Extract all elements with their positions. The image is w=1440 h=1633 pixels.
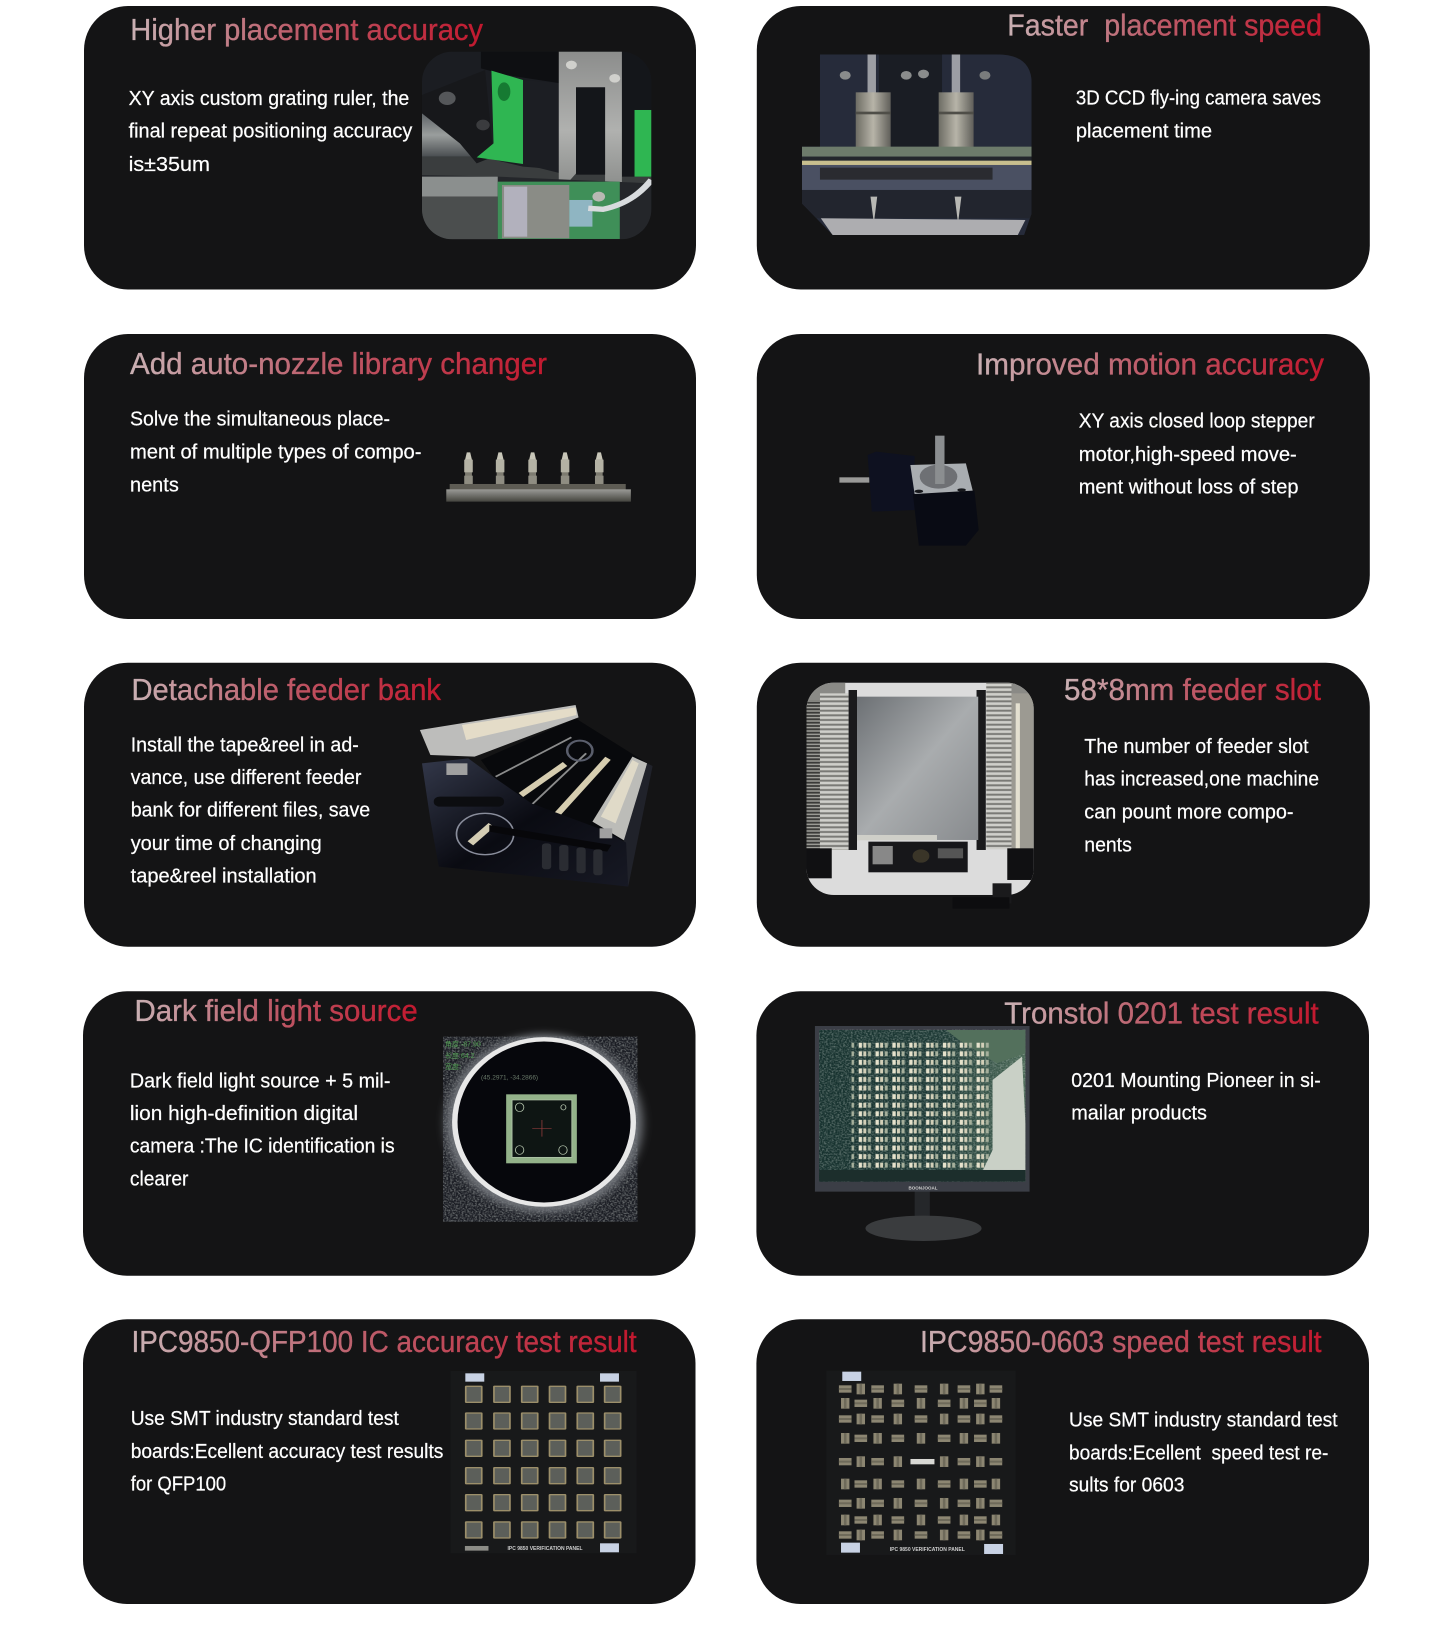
heading: IPC9850-QFP100 IC accuracy test result: IPC9850-QFP100 IC accuracy test result — [132, 1324, 637, 1359]
description: fly-ing camera — [1076, 88, 1321, 142]
image: IC under dark field light: 长度:64.2 — [445, 1051, 475, 1060]
image: placement heads — [802, 54, 1032, 235]
description: dark field camera: clearer — [130, 1169, 189, 1191]
heading: dark field light source: Dark field light source — [134, 993, 418, 1028]
description: fly-ing camera: 3D CCD fly-ing camera saves — [1076, 88, 1321, 110]
description: 0603 test boards — [1069, 1410, 1338, 1497]
panel: QFP100 accuracy test — [83, 1319, 696, 1604]
image: IC under dark field light: (45.2971, -34.2866) — [481, 1074, 538, 1082]
description: feeder bank — [131, 735, 370, 888]
description: stepper motor: motor,high-speed move- — [1079, 444, 1297, 466]
description: stepper motor — [1079, 411, 1315, 499]
panel: detachable feeder bank — [84, 663, 696, 947]
heading: add auto-nozzle library changer: Add auto-nozzle library changer — [130, 346, 547, 381]
heading: 58*8mm feeder slot: 58*8mm feeder slot — [1064, 672, 1321, 707]
panel: faster placement speed — [757, 6, 1370, 290]
description: feeder bank: Install the tape&reel in ad- — [131, 735, 359, 757]
panel: dark field light source — [83, 991, 696, 1276]
description: feeder slot count: nents — [1084, 834, 1132, 856]
image: 0603 verification board: IPC 9850 VERIFICATION PANEL — [890, 1547, 965, 1553]
description: feeder slot count: The number of feeder slot — [1084, 736, 1309, 758]
description: feeder bank: tape&reel installation — [131, 866, 317, 888]
image: monitor showing 0201 placement — [815, 1026, 1030, 1241]
description: dark field camera — [130, 1071, 395, 1191]
description: grating ruler: XY axis custom grating ruler, the — [129, 88, 409, 110]
image: machine top view — [807, 683, 1034, 909]
image: feeder bank frame — [420, 705, 653, 887]
heading: improved motion accuracy: Improved motion accuracy — [976, 346, 1324, 381]
description: 0201 mounting — [1071, 1070, 1321, 1125]
description: dark field camera: lion high-definition digital — [130, 1103, 358, 1125]
panel: 0201 test result — [756, 991, 1369, 1276]
panel: improved motion accuracy — [757, 334, 1370, 619]
image: IC under dark field light: 宽度: — [445, 1062, 461, 1071]
description: stepper motor: XY axis closed loop stepper — [1079, 411, 1315, 433]
description: stepper motor: ment without loss of step — [1079, 477, 1298, 499]
description: nozzle library: Solve the simultaneous place- — [130, 409, 390, 431]
description: dark field camera: camera :The IC identification is — [130, 1136, 395, 1158]
image: monitor showing 0201 placement: BOONJOOAL — [908, 1186, 938, 1190]
heading: faster placement speed: Faster placement speed — [1007, 8, 1322, 43]
description: QFP100 test boards: for QFP100 — [131, 1473, 226, 1495]
description: 0603 test boards: boards:Ecellent speed test re- — [1069, 1443, 1328, 1465]
image: nozzle rack — [446, 452, 631, 502]
description: 0603 test boards: Use SMT industry standard test — [1069, 1410, 1338, 1432]
heading: tronstol 0201 test result: Tronstol 0201 test result — [1004, 995, 1319, 1030]
description: nozzle library: ment of multiple types of compo- — [130, 442, 422, 464]
description: 0603 test boards: sults for 0603 — [1069, 1475, 1184, 1497]
description: 0201 mounting: 0201 Mounting Pioneer in si- — [1071, 1070, 1321, 1092]
description: fly-ing camera: placement time — [1076, 120, 1212, 142]
description: feeder slot count: has increased,one machine — [1084, 769, 1319, 791]
description: nozzle library — [130, 409, 422, 496]
description: QFP100 test boards — [131, 1408, 443, 1495]
heading: IPC9850-0603 speed test result: IPC9850-0603 speed test result — [920, 1324, 1322, 1359]
description: QFP100 test boards: Use SMT industry standard test — [131, 1408, 399, 1430]
description: feeder slot count: can pount more compo- — [1084, 802, 1294, 824]
description: grating ruler: is±35um — [129, 154, 210, 176]
description: feeder bank: your time of changing — [131, 833, 322, 855]
panel: feeder slot — [757, 663, 1370, 947]
description: QFP100 test boards: boards:Ecellent accuracy test results — [131, 1441, 443, 1463]
image: QFP100 verification board — [451, 1371, 637, 1553]
description: grating ruler: final repeat positioning accuracy — [129, 121, 412, 143]
image: QFP100 verification board: IPC 9850 VERIFICATION PANEL — [508, 1546, 583, 1552]
panel: higher placement accuracy — [84, 6, 696, 290]
image: IC under dark field light: 角度:-87.90 — [445, 1040, 481, 1049]
description: feeder bank: bank for different files, save — [131, 800, 370, 822]
panel: auto-nozzle library — [84, 334, 696, 619]
image: stepper motor — [839, 436, 979, 546]
image: linear guide with grating sensor — [422, 52, 651, 239]
heading: detachable feeder bank: Detachable feeder bank — [132, 672, 441, 707]
description: feeder slot count — [1084, 736, 1319, 856]
image: IC under dark field light — [443, 1037, 637, 1222]
description: nozzle library: nents — [130, 474, 179, 496]
description: feeder bank: vance, use different feeder — [131, 767, 362, 789]
heading: higher placement accuracy: Higher placement accuracy — [130, 12, 483, 47]
panel: 0603 speed test — [756, 1319, 1369, 1604]
image: 0603 verification board — [826, 1371, 1016, 1555]
description: 0201 mounting: mailar products — [1071, 1103, 1207, 1125]
description: grating ruler — [129, 88, 412, 176]
description: dark field camera: Dark field light source + 5 mil- — [130, 1071, 390, 1093]
